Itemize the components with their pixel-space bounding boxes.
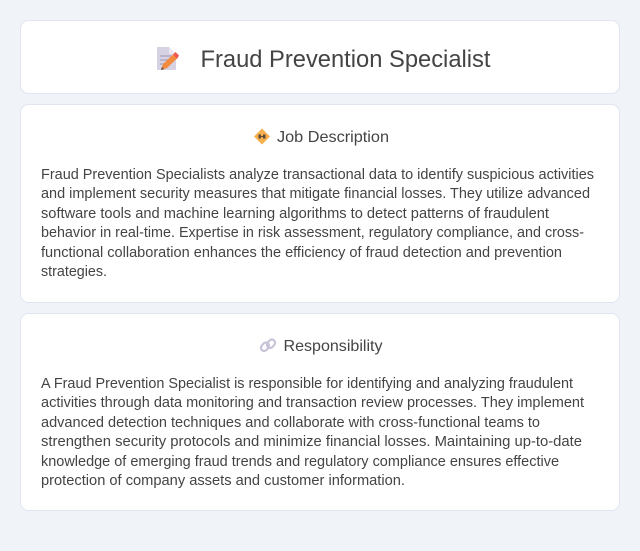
text block: responsibility: knowledge of emerging fraud trends and regulatory compliance ensures effective bbox=[41, 454, 559, 470]
icon: job diamond bbox=[254, 128, 270, 144]
text block: job description bbox=[41, 167, 594, 280]
heading: responsibility: Responsibility bbox=[284, 338, 382, 355]
text block: responsibility: strengthen security protocols and minimize financial losses. Maintaining up-to-date bbox=[41, 434, 582, 450]
text block: responsibility: activities through data monitoring and transaction review processes. They implement bbox=[41, 395, 584, 411]
panel: job description bbox=[20, 104, 620, 302]
panel: title card bbox=[20, 20, 620, 94]
text block: job description: behavior in real-time. Expertise in risk assessment, regulatory compliance, and cross- bbox=[41, 225, 584, 241]
text block: job description: strategies. bbox=[41, 264, 107, 280]
text block: responsibility: A Fraud Prevention Specialist is responsible for identifying and analyzing fraudulent bbox=[41, 376, 573, 392]
text block: responsibility bbox=[41, 376, 584, 489]
text block: job description: and implement security measures that mitigate financial losses. They utilize advanced bbox=[41, 186, 590, 202]
text block: job description: software tools and machine learning algorithms to detect patterns of fraudulent bbox=[41, 206, 549, 222]
text block: job description: Fraud Prevention Specialists analyze transactional data to identify suspicious activities bbox=[41, 167, 594, 183]
text block: job description: functional collaboration enhances the efficiency of fraud detection and prevention bbox=[41, 245, 562, 261]
text block: responsibility: advanced detection techniques and collaborate with cross-functional teams to bbox=[41, 415, 540, 431]
heading: job description: Job Description bbox=[277, 129, 389, 146]
icon: document with pencil bbox=[157, 47, 179, 70]
title: Fraud Prevention Specialist bbox=[200, 46, 491, 73]
text block: responsibility: protection of company assets and customer information. bbox=[41, 473, 405, 489]
panel: responsibility bbox=[20, 314, 620, 510]
icon: chain link bbox=[260, 338, 276, 352]
